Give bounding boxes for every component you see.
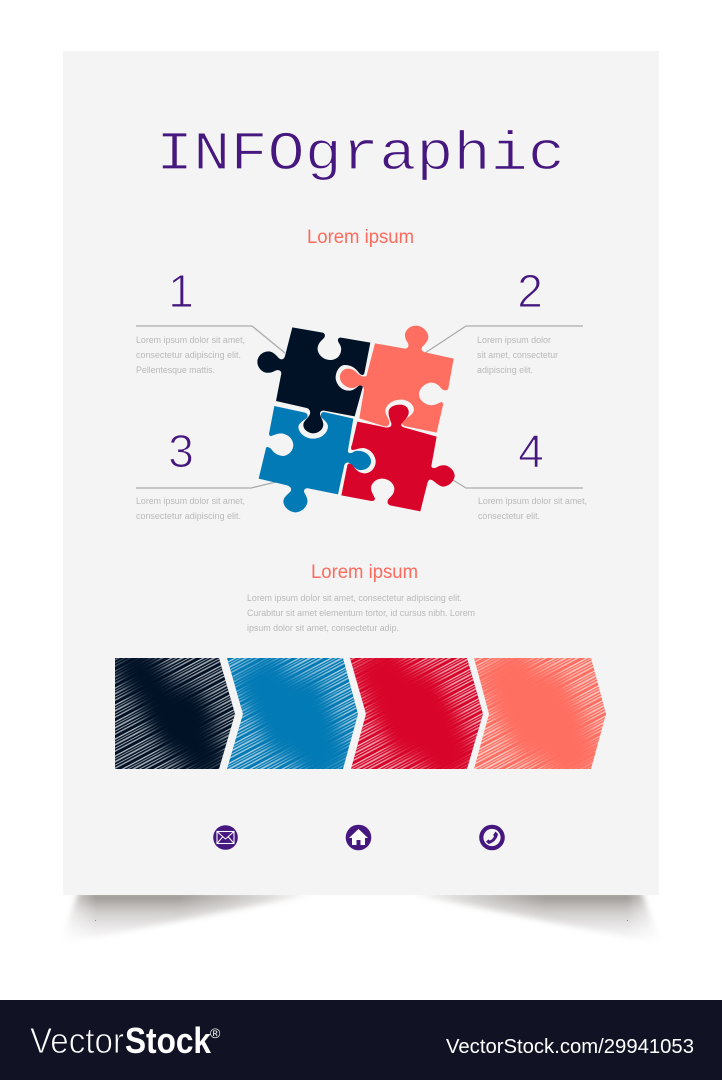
paragraph: ipsum dolor sit amet, consectetur adip.	[247, 622, 399, 633]
number 4: 4	[518, 425, 544, 477]
icon: home	[346, 825, 371, 850]
footer url: VectorStock.com/29941053	[446, 1036, 694, 1058]
puzzle piece: navy	[257, 327, 370, 433]
text block 2: sit amet, consectetur	[477, 349, 558, 360]
heading: middle: Lorem ipsum	[311, 561, 418, 583]
arrow 2: blue	[227, 658, 358, 769]
step 1	[136, 265, 285, 375]
text block 1: consectetur adipiscing elit.	[136, 349, 241, 360]
text block 2: adipiscing elit.	[477, 364, 533, 375]
text block 3: consectetur adipiscing elit.	[136, 510, 241, 521]
step 3	[136, 425, 276, 521]
title: INFOgraphic	[156, 125, 565, 186]
logo: VectorStock: Stock	[125, 1020, 212, 1061]
arrow 3: red	[350, 658, 483, 769]
text block 1: Pellentesque mattis.	[136, 364, 215, 375]
paper shadow	[69, 895, 652, 936]
step 4	[453, 425, 587, 521]
leader line 1	[136, 326, 285, 353]
puzzle graphic	[257, 326, 455, 512]
puzzle piece: salmon	[340, 326, 454, 433]
puzzle piece: red	[341, 405, 455, 511]
puzzle piece: blue	[259, 406, 371, 512]
paragraph: Curabitur sit amet elementum tortor, id cursus nibh. Lorem	[247, 607, 475, 618]
text block 1: Lorem ipsum dolor sit amet,	[136, 334, 245, 345]
arrow 4: salmon	[474, 658, 606, 769]
logo: VectorStock: ®	[210, 1025, 221, 1041]
logo: VectorStock: Vector	[30, 1020, 124, 1061]
arrow band	[115, 658, 606, 769]
heading: top: Lorem ipsum	[307, 226, 414, 248]
footer band	[0, 1000, 722, 1080]
number 1: 1	[168, 265, 194, 317]
text block 4: consectetur elit.	[478, 510, 540, 521]
number 3: 3	[168, 425, 194, 477]
arrow 1: navy	[115, 658, 235, 769]
text block 3: Lorem ipsum dolor sit amet,	[136, 495, 245, 506]
step 2	[425, 265, 583, 375]
text block 2: Lorem ipsum dolor	[477, 334, 551, 345]
paragraph: Lorem ipsum dolor sit amet, consectetur adipiscing elit.	[247, 592, 462, 603]
text block 4: Lorem ipsum dolor sit amet,	[478, 495, 587, 506]
icon: mail	[213, 825, 238, 850]
leader line 2	[425, 326, 583, 353]
leader line 4	[453, 480, 583, 488]
paper panel	[63, 51, 659, 895]
number 2: 2	[517, 265, 543, 317]
icon: phone	[479, 825, 505, 850]
leader line 3	[136, 482, 276, 488]
